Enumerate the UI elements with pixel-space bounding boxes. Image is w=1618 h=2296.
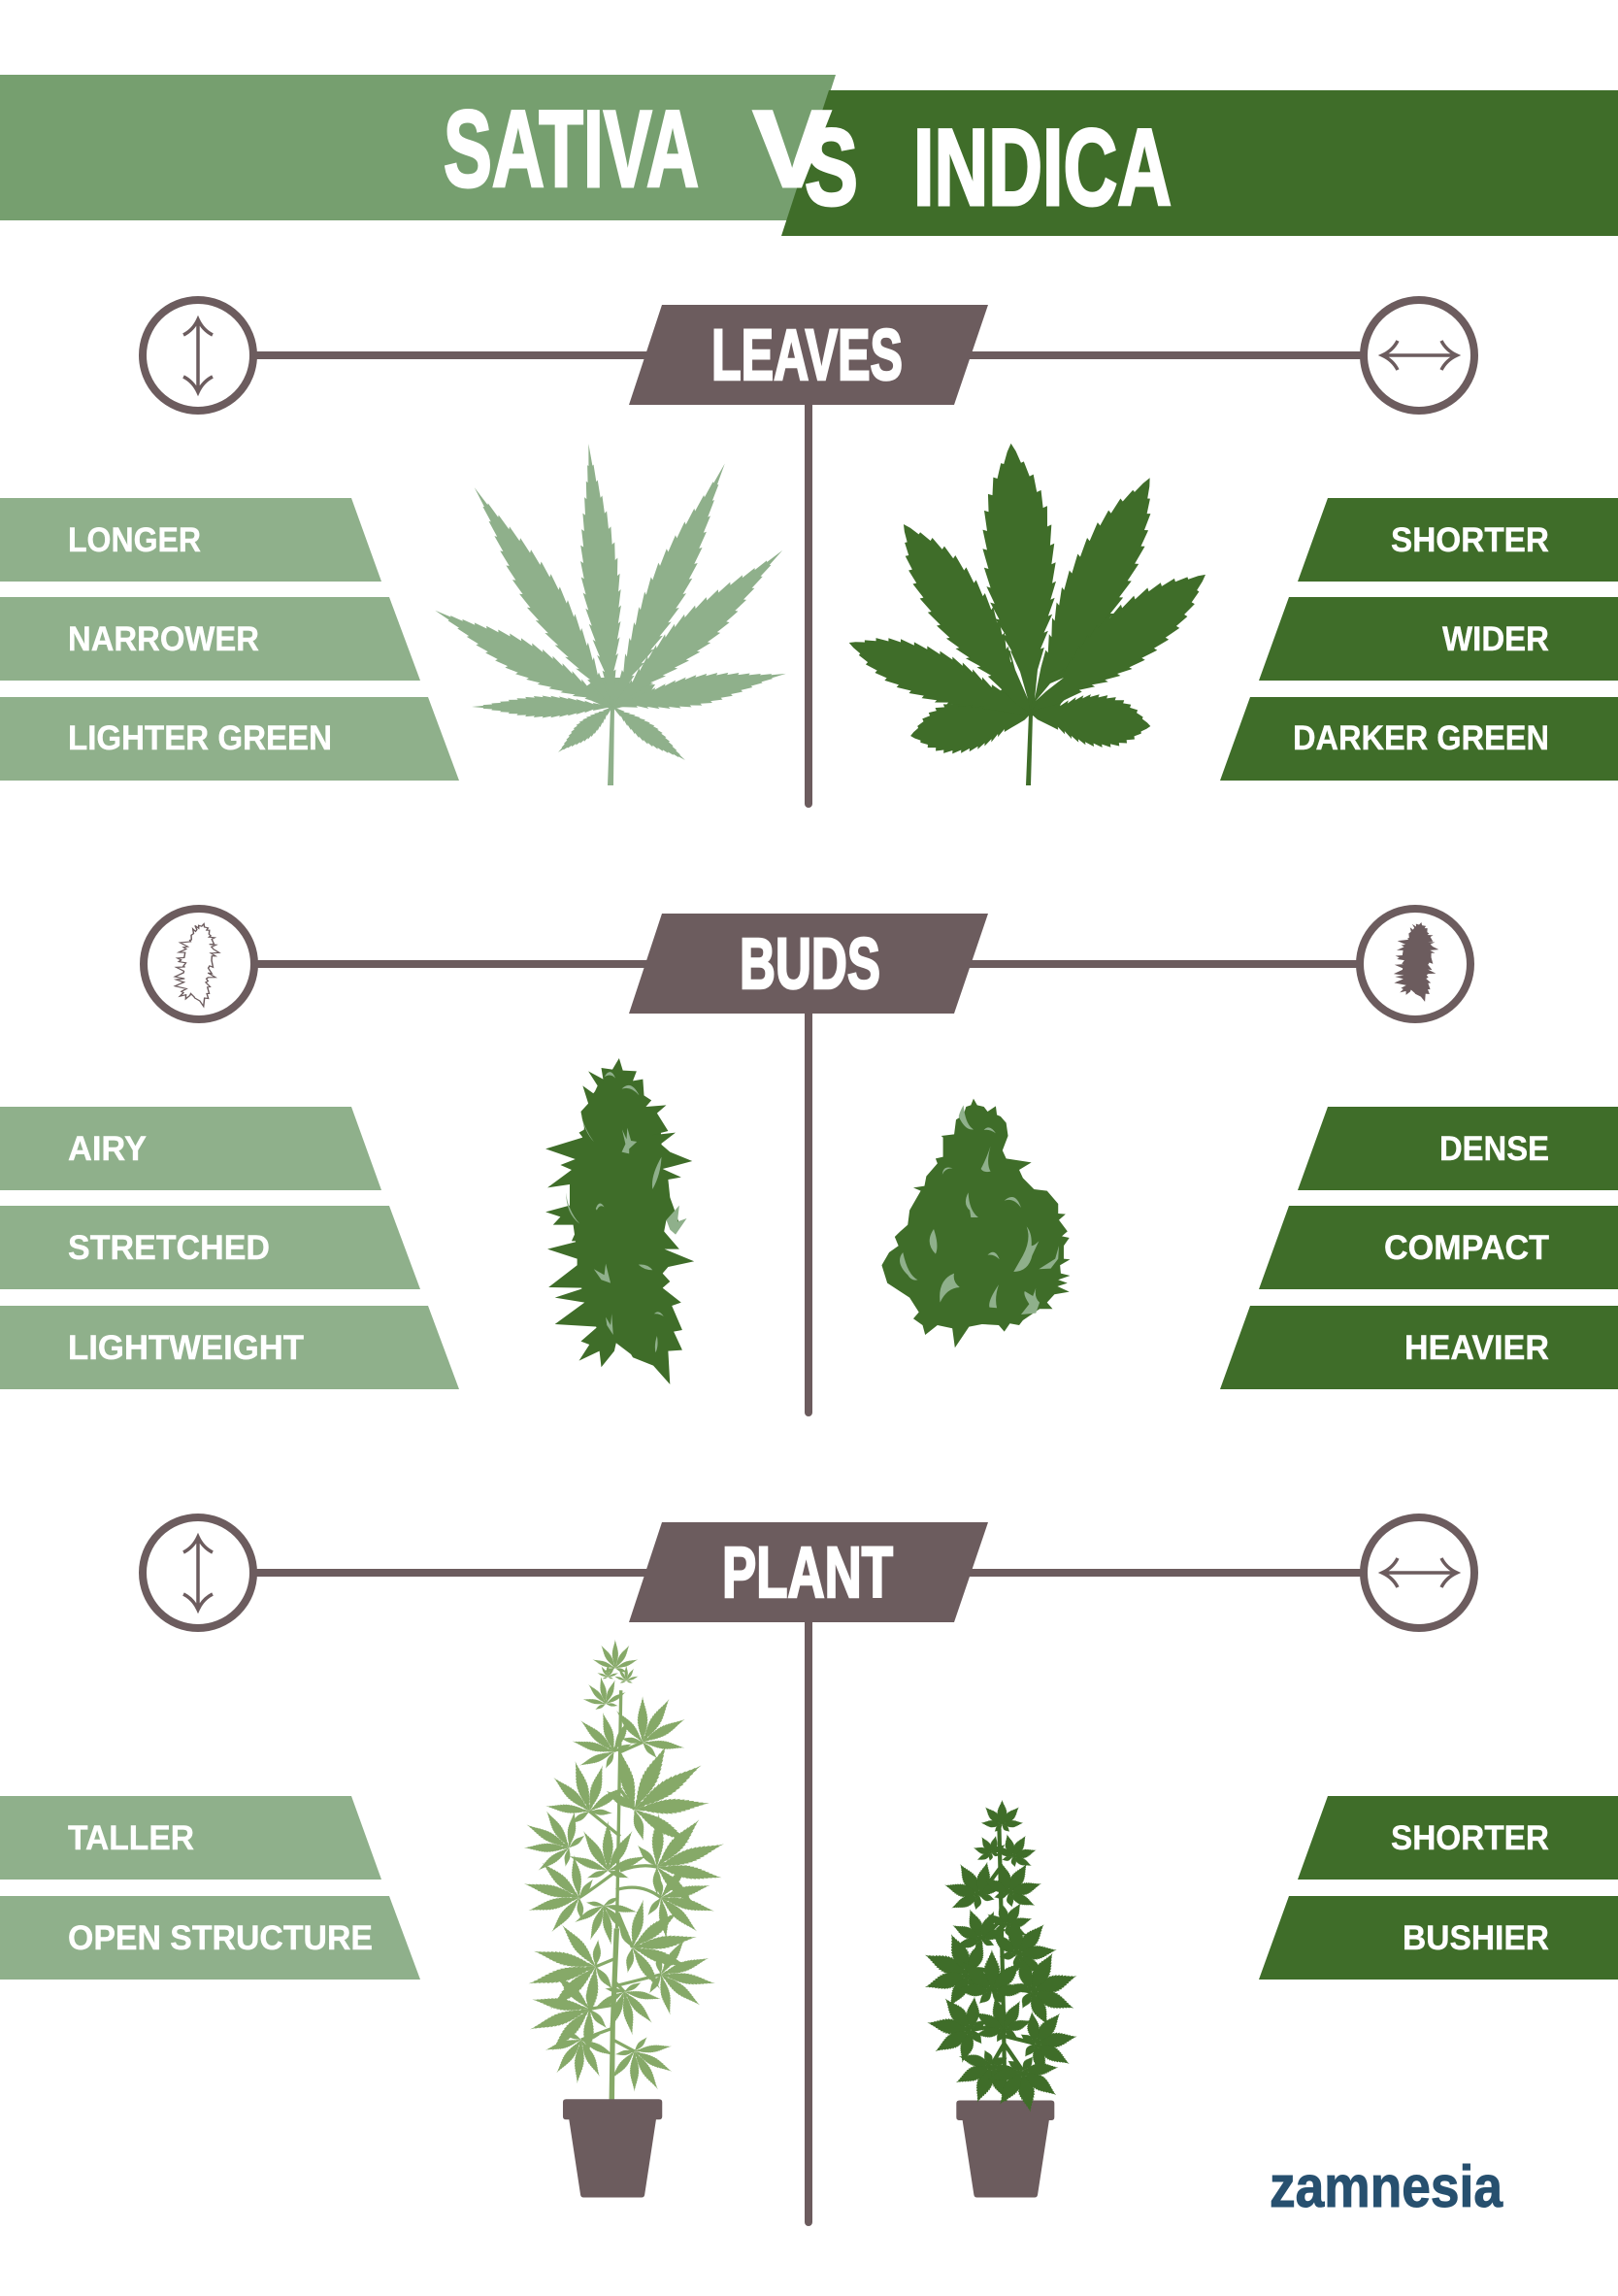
- indica leaf: [840, 441, 1224, 785]
- icon: wide arrow: [1364, 300, 1474, 411]
- plant heading: [629, 1522, 988, 1622]
- label: wider: WIDER: [1442, 620, 1549, 658]
- label: lighter green: LIGHTER GREEN: [68, 719, 332, 757]
- label: narrower: NARROWER: [68, 620, 259, 658]
- icon: tall arrow: [143, 300, 253, 411]
- label: longer: [0, 498, 381, 582]
- buds heading: [629, 914, 988, 1014]
- label: darker green: [1220, 697, 1618, 781]
- icon: dense bud: [1360, 909, 1470, 1019]
- icon: wide arrow: [1364, 1517, 1474, 1628]
- label: dense: [1298, 1107, 1618, 1190]
- label: heavier: [1220, 1306, 1618, 1389]
- sativa bud: [545, 1058, 694, 1384]
- label: shorter: SHORTER: [1391, 521, 1549, 559]
- section: buds: [0, 909, 1618, 1413]
- label: lightweight: [0, 1306, 459, 1389]
- sativa plant in pot: [508, 1640, 743, 2197]
- header: sativa vs indica: [0, 75, 1618, 236]
- label: stretched: STRETCHED: [68, 1229, 270, 1267]
- label: bushier: [1259, 1896, 1618, 1980]
- section: leaves: [0, 300, 1618, 804]
- label: compact: [1259, 1206, 1618, 1289]
- title: S: S: [805, 107, 858, 228]
- indica banner: [781, 90, 1618, 236]
- label: taller: TALLER: [68, 1819, 194, 1857]
- label: taller: [0, 1796, 381, 1880]
- label: airy: [0, 1107, 381, 1190]
- label: open structure: OPEN STRUCTURE: [68, 1919, 373, 1957]
- label: bushier: BUSHIER: [1403, 1919, 1549, 1957]
- buds heading: BUDS: [740, 923, 880, 1004]
- label: longer: LONGER: [68, 521, 201, 559]
- indica plant in pot: [908, 1800, 1090, 2197]
- indica bud: [881, 1099, 1070, 1348]
- label: darker green: DARKER GREEN: [1293, 719, 1549, 757]
- title: indica: INDICA: [913, 107, 1172, 228]
- label: shorter: [1298, 498, 1618, 582]
- label: airy: AIRY: [68, 1130, 147, 1168]
- leaves connector lines: [254, 355, 1363, 804]
- logo: zamnesia: zamnesia: [1270, 2154, 1503, 2219]
- icon: airy bud: [144, 909, 254, 1019]
- label: shorter: [1298, 1796, 1618, 1880]
- label: shorter: SHORTER: [1391, 1819, 1549, 1857]
- plant connector lines: [254, 1573, 1363, 2222]
- label: narrower: [0, 597, 420, 681]
- label: dense: DENSE: [1439, 1130, 1549, 1168]
- label: open structure: [0, 1896, 420, 1980]
- sativa banner: [0, 75, 836, 220]
- plant heading: PLANT: [722, 1532, 893, 1613]
- leaves heading: [629, 305, 988, 405]
- icon: tall arrow: [143, 1517, 253, 1628]
- title: V: V: [753, 88, 831, 210]
- label: stretched: [0, 1206, 420, 1289]
- section: plant: [0, 1517, 1618, 2222]
- sativa leaf: [427, 442, 796, 785]
- indica pot: [956, 2100, 1054, 2197]
- label: heavier: HEAVIER: [1404, 1329, 1549, 1367]
- sativa pot: [563, 2099, 662, 2197]
- buds connector lines: [254, 964, 1359, 1413]
- label: wider: [1259, 597, 1618, 681]
- label: compact: COMPACT: [1384, 1229, 1549, 1267]
- leaves heading: LEAVES: [711, 315, 903, 395]
- label: lightweight: LIGHTWEIGHT: [68, 1329, 304, 1367]
- label: lighter green: [0, 697, 459, 781]
- title: sativa: SATIVA: [444, 88, 699, 210]
